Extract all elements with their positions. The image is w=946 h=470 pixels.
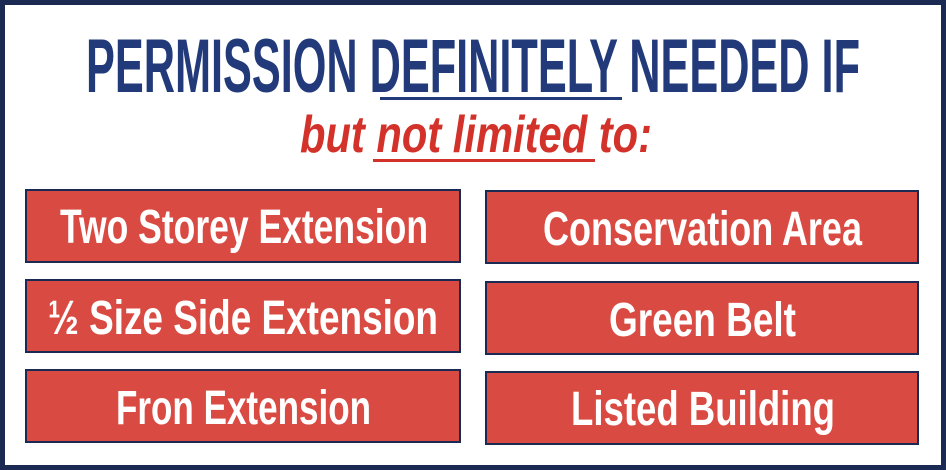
subtitle: but not limited to: <box>300 106 652 164</box>
box: Fron Extension: Fron Extension <box>116 382 371 435</box>
box: Half Size Side Extension <box>26 280 460 352</box>
box: Green Belt <box>486 282 918 354</box>
box: Two Storey Extension: Two Storey Extension <box>60 201 428 254</box>
box: Listed Building: Listed Building <box>571 383 835 436</box>
box: Listed Building <box>486 372 918 444</box>
box: Fron Extension <box>26 370 460 442</box>
box: Two Storey Extension <box>26 190 460 262</box>
box: Green Belt: Green Belt <box>609 294 796 347</box>
box: Half Size Side Extension: ½ Size Side Extension <box>48 292 438 345</box>
box: Conservation Area <box>486 191 918 263</box>
